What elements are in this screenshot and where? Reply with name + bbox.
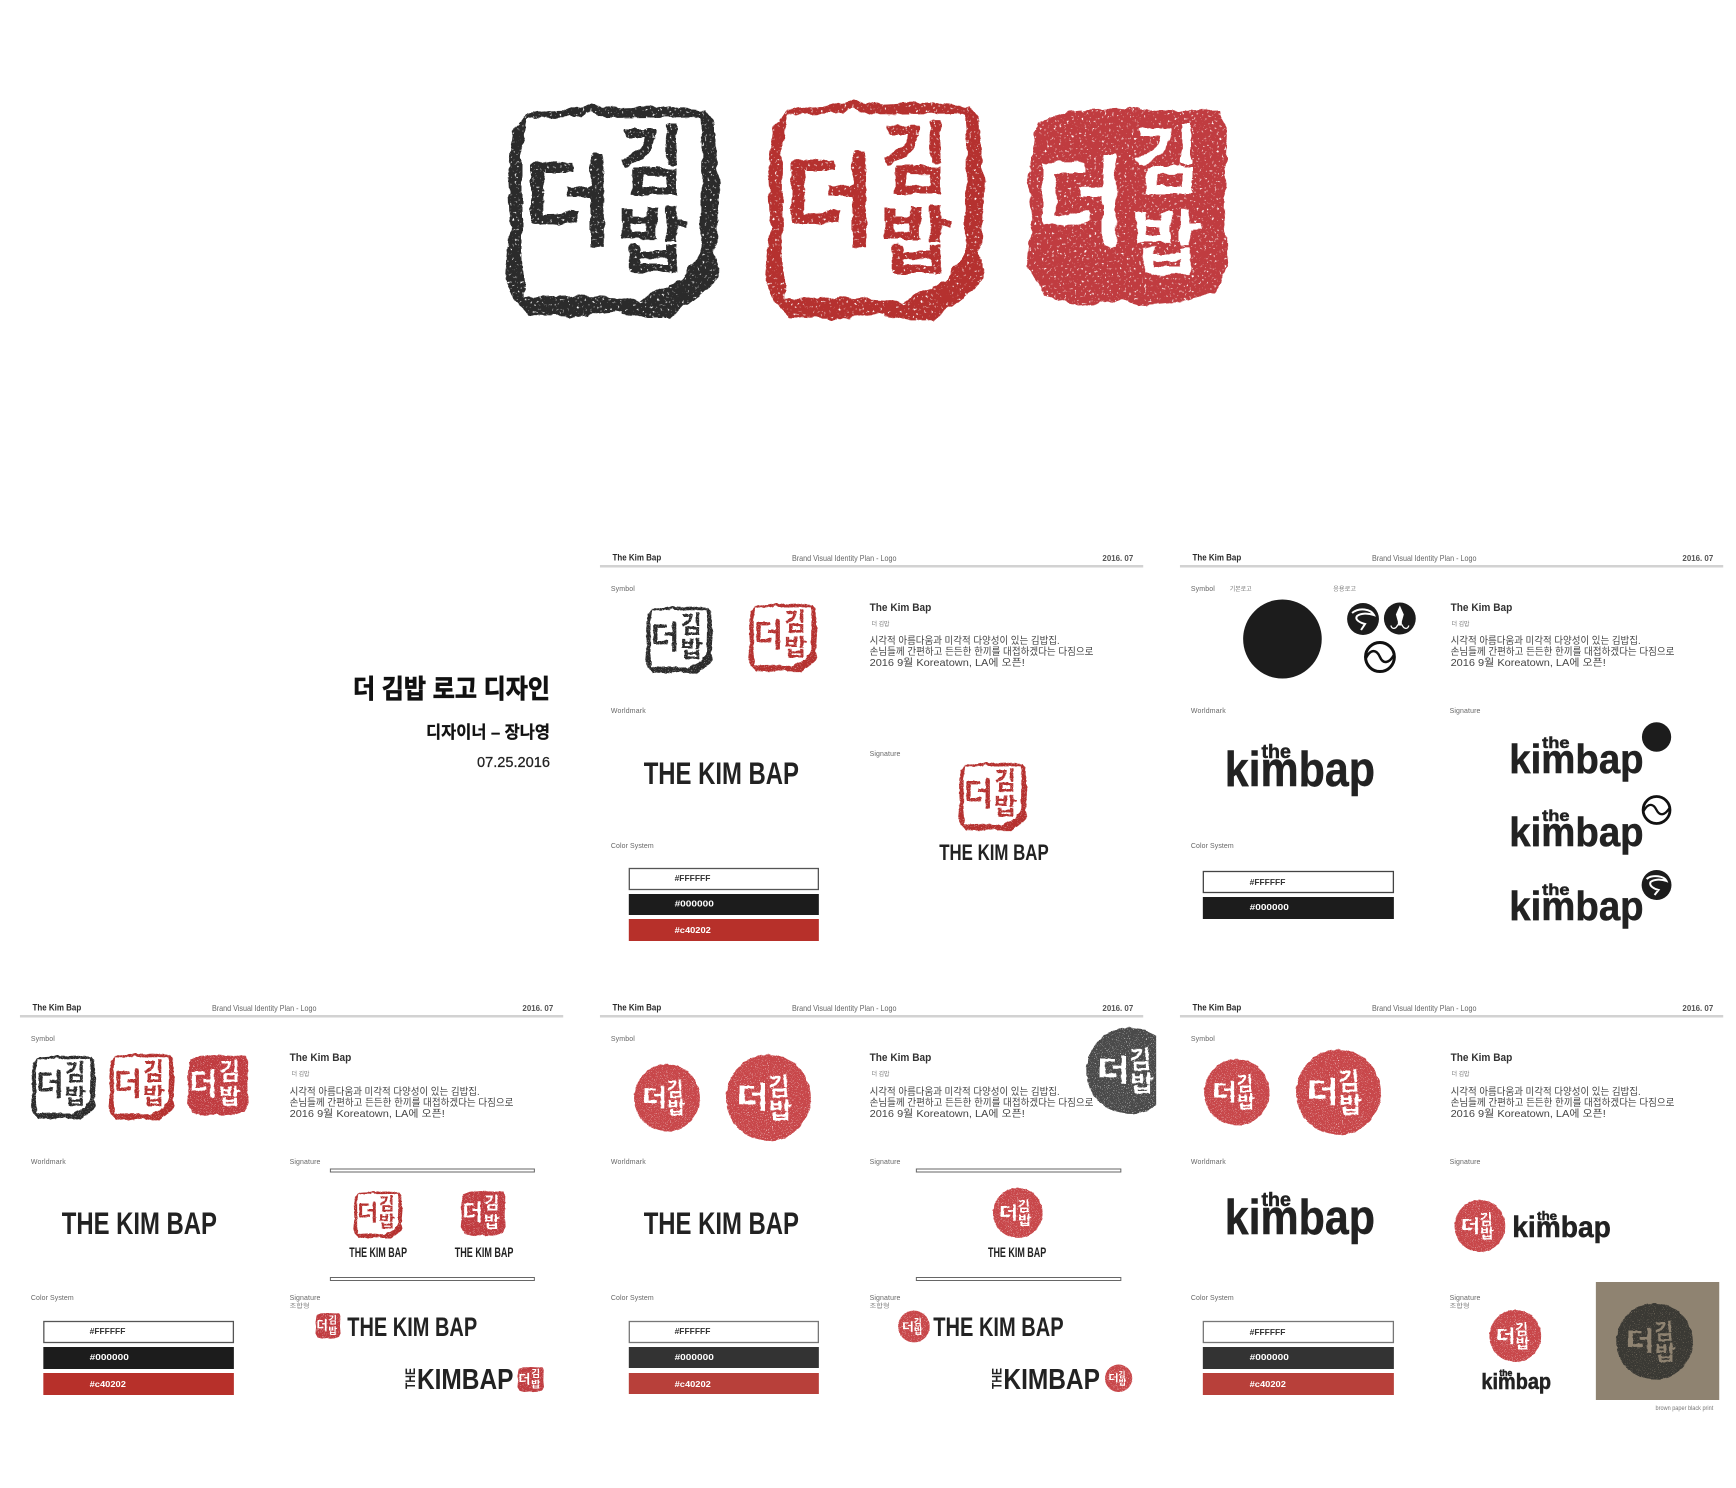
description: 손님들께 간편하고 든든한 한끼를 대접하겠다는 다짐으로	[870, 645, 1093, 658]
description: 시각적 아름다움과 미각적 다양성이 있는 김밥집.	[290, 1086, 480, 1098]
icon: solid stamp: 밥	[219, 1085, 241, 1109]
icon: shrimp	[1347, 603, 1379, 635]
icon: black stamp: 김	[65, 1060, 85, 1086]
signature: round stamp: 더	[999, 1203, 1018, 1223]
title: 더 김밥 로고 디자인	[353, 674, 550, 704]
icon: big black circle	[1243, 600, 1322, 678]
color swatches	[629, 1322, 819, 1394]
panel: three stamps with signatures: Color System	[31, 1295, 74, 1302]
panel: round stamps with wordmark: Worldmark	[611, 1159, 646, 1166]
icon: small round stamp: 밥	[667, 1098, 685, 1118]
description: 2016 9월 Koreatown, LA에 오픈!	[1451, 657, 1606, 669]
wordmark: the kimbap: the	[1262, 742, 1291, 763]
panel: round stamps with lowercase wordmark: Signature	[1450, 1159, 1481, 1166]
signature: outline stamp: THE KIM BAP	[349, 1244, 407, 1260]
combination signature: round stamp left: 밥	[914, 1326, 923, 1336]
description: 시각적 아름다움과 미각적 다양성이 있는 김밥집.	[870, 1086, 1060, 1098]
combination signature: stacked: 밥	[1516, 1336, 1530, 1352]
icon: black stamp: 밥	[680, 637, 703, 663]
signature lockup: THE KIM BAP	[939, 840, 1049, 865]
color swatches: #000000	[90, 1352, 129, 1362]
panel: round stamps with wordmark: Signature	[870, 1159, 901, 1166]
color swatches: #FFFFFF	[1250, 877, 1285, 887]
icon: red stamp	[748, 603, 817, 672]
panel: circle symbols and lowercase wordmark: 2016. 07	[1682, 554, 1714, 563]
combination signature: stamp right: 더	[518, 1372, 530, 1386]
panel: round stamps with lowercase wordmark: The Kim Bap	[1192, 1002, 1242, 1013]
panel: round stamps with lowercase wordmark: Signature	[1450, 1295, 1481, 1302]
brown paper print sample: 김	[1654, 1320, 1673, 1344]
icon: red stamp: 더	[754, 617, 783, 653]
signature: kimbap with black circle	[1509, 722, 1671, 782]
signature: kimbap with black circle: the	[1542, 735, 1570, 752]
combination signature: stacked	[1481, 1310, 1551, 1394]
description: 시각적 아름다움과 미각적 다양성이 있는 김밥집.	[1451, 1086, 1641, 1098]
icon: small round stamp: 김	[667, 1078, 683, 1100]
icon: large round stamp: 더	[1307, 1076, 1339, 1109]
signature: kimbap with yin-yang: kimbap	[1509, 809, 1644, 855]
icon: squid	[1384, 602, 1416, 634]
description: 손님들께 간편하고 든든한 한끼를 대접하겠다는 다짐으로	[1451, 645, 1674, 658]
combination signature: round stamp left: 더	[902, 1320, 914, 1333]
color swatches: #FFFFFF	[675, 1326, 710, 1336]
panel: three stamps with signatures: Signature	[290, 1159, 321, 1166]
hero logo: black outline stamp: 밥	[617, 201, 689, 281]
brown paper print sample: 더	[1626, 1328, 1655, 1357]
description: The Kim Bap	[290, 1052, 352, 1064]
hero logo: solid red stamp	[1027, 108, 1229, 306]
combination signature: stamp left: 밥	[328, 1325, 338, 1336]
icon: red stamp: 더	[114, 1067, 142, 1102]
panel: round stamps with wordmark: 조합형	[870, 1302, 889, 1310]
icon: red stamp: 김	[785, 609, 806, 637]
panel: circle symbols and lowercase wordmark: Brand Visual Identity Plan - Logo	[1372, 554, 1477, 563]
icon: grey round stamp, clipped: 밥	[1130, 1072, 1154, 1097]
icon: black stamp: 김	[681, 611, 702, 638]
icon: black stamp	[31, 1055, 96, 1119]
color swatches: #000000	[1250, 1352, 1289, 1362]
description: 2016 9월 Koreatown, LA에 오픈!	[870, 1108, 1025, 1120]
hero logo: red outline stamp	[765, 100, 985, 320]
description: 2016 9월 Koreatown, LA에 오픈!	[290, 1108, 445, 1120]
wordmark: the kimbap: kimbap	[1225, 743, 1375, 797]
signature: kimbap with black circle: kimbap	[1509, 736, 1644, 782]
color swatches	[43, 1322, 234, 1395]
color swatches	[629, 868, 819, 941]
signature: kimbap with shrimp: the	[1542, 882, 1570, 899]
signature: outline stamp: 밥	[379, 1213, 396, 1231]
description: 2016 9월 Koreatown, LA에 오픈!	[870, 657, 1025, 669]
description: 손님들께 간편하고 든든한 한끼를 대접하겠다는 다짐으로	[870, 1096, 1093, 1109]
combination signature: round stamp left	[898, 1311, 1064, 1342]
description	[870, 1052, 1093, 1120]
signature: solid stamp: THE KIM BAP	[455, 1244, 513, 1260]
panel: circle symbols and lowercase wordmark: Worldmark	[1191, 708, 1226, 715]
signature lockup	[939, 762, 1049, 865]
signature: round stamp and kimbap	[1455, 1200, 1611, 1252]
combination signature: round stamp right: 김	[1118, 1369, 1125, 1380]
description: 시각적 아름다움과 미각적 다양성이 있는 김밥집.	[1451, 635, 1641, 647]
signature: outline stamp: 김	[379, 1195, 394, 1214]
signature: round stamp: 김	[1018, 1198, 1030, 1215]
icon: large round stamp: 김	[1338, 1068, 1359, 1096]
combination signature: stamp right: 김	[531, 1368, 540, 1380]
icon: large round stamp: 김	[768, 1074, 789, 1102]
icon: red stamp	[109, 1053, 175, 1120]
signature: round stamp: 밥	[1018, 1213, 1032, 1228]
signature: round stamp and kimbap: 김	[1480, 1211, 1492, 1229]
panel: square stamp symbols and wordmark: 2016. 07	[1102, 554, 1134, 563]
combination signature: stamp right: THE	[402, 1368, 418, 1389]
description: 더 김밥	[1452, 620, 1470, 628]
panel: three stamps with signatures: Signature	[290, 1295, 321, 1302]
panel: three stamps with signatures: Symbol	[31, 1036, 55, 1043]
panel: circle symbols and lowercase wordmark: 기본로고	[1230, 585, 1252, 593]
panel: square stamp symbols and wordmark: Signature	[870, 751, 901, 758]
panel: three stamps with signatures: Brand Visual Identity Plan - Logo	[212, 1004, 317, 1013]
icon: solid stamp	[187, 1055, 249, 1116]
color swatches: #000000	[1250, 902, 1289, 912]
panel: circle symbols and lowercase wordmark: Color System	[1191, 843, 1234, 850]
panel: round stamps with wordmark: The Kim Bap	[612, 1002, 662, 1013]
panel: square stamp symbols and wordmark: Worldmark	[611, 708, 646, 715]
icon: small round stamp: 더	[1212, 1080, 1237, 1106]
combination signature: round stamp right: 밥	[1119, 1377, 1126, 1387]
description: 더 김밥	[872, 1070, 890, 1078]
signature: round stamp: THE KIM BAP	[988, 1244, 1046, 1260]
combination signature: stamp left: THE KIM BAP	[347, 1312, 477, 1342]
signature lockup: 더	[964, 776, 993, 812]
signature: round stamp and kimbap: kimbap	[1512, 1211, 1611, 1244]
color swatches: #000000	[675, 898, 714, 909]
combination signature: round stamp right: 더	[1108, 1372, 1119, 1384]
combination signature: round stamp right: THE	[988, 1368, 1004, 1389]
signature: solid stamp	[455, 1191, 513, 1260]
description: 더 김밥	[1452, 1070, 1470, 1078]
icon: grey round stamp, clipped: 더	[1097, 1054, 1130, 1088]
panel: round stamps with wordmark: Symbol	[611, 1036, 635, 1043]
panel: round stamps with lowercase wordmark: 2016. 07	[1682, 1004, 1714, 1013]
panel: three stamps with signatures: The Kim Bap	[32, 1002, 82, 1013]
color swatches: #c40202	[90, 1379, 126, 1389]
icon: red stamp: 밥	[143, 1084, 165, 1109]
description	[290, 1052, 513, 1120]
hero logo: black outline stamp: 김	[618, 120, 684, 205]
title block	[353, 674, 550, 771]
combination signature: stamp left	[315, 1312, 477, 1342]
description: 시각적 아름다움과 미각적 다양성이 있는 김밥집.	[870, 635, 1060, 647]
color swatches: #FFFFFF	[90, 1326, 125, 1336]
signature: round stamp and kimbap: 더	[1461, 1217, 1480, 1237]
color swatches: #FFFFFF	[1250, 1327, 1285, 1337]
combination signature: stacked: kimbap	[1481, 1369, 1551, 1394]
panel: circle symbols and lowercase wordmark	[1180, 552, 1723, 929]
brown paper print sample: brown paper black print	[1656, 1406, 1714, 1412]
icon: grey round stamp, clipped	[1086, 1026, 1156, 1114]
description: The Kim Bap	[1451, 1052, 1513, 1064]
icon: black stamp: 더	[36, 1068, 64, 1102]
date: 07.25.2016	[477, 755, 550, 771]
signature: solid stamp: 더	[462, 1200, 483, 1226]
icon: large round stamp	[1296, 1050, 1381, 1135]
icon: red stamp: 김	[143, 1058, 164, 1085]
combination signature: stacked: the	[1499, 1368, 1512, 1378]
hero logo: black outline stamp: 더	[522, 148, 614, 260]
color swatches: #c40202	[675, 925, 711, 935]
combination signature: stamp left: 더	[316, 1318, 328, 1333]
color swatches: #000000	[675, 1352, 714, 1362]
panel: square stamp symbols and wordmark: Symbol	[611, 586, 635, 593]
panel: round stamps with wordmark: Brand Visual Identity Plan - Logo	[792, 1004, 897, 1013]
brown paper print sample	[1596, 1282, 1719, 1412]
combination signature: stamp right: 밥	[531, 1379, 541, 1390]
hero logo: solid red stamp: 밥	[1131, 204, 1202, 283]
panel: three stamps with signatures: Worldmark	[31, 1159, 66, 1166]
wordmark: the kimbap: kimbap	[1225, 1191, 1375, 1245]
hero logo: black outline stamp	[505, 104, 720, 318]
panel: square stamp symbols and wordmark	[600, 552, 1143, 941]
signature: outline stamp	[349, 1191, 407, 1260]
description: The Kim Bap	[870, 602, 932, 614]
icon: black stamp: 밥	[65, 1085, 87, 1109]
signature: solid stamp: 밥	[484, 1213, 500, 1231]
signature lockup: 밥	[994, 794, 1017, 820]
panel: three stamps with signatures	[20, 1002, 563, 1396]
panel: three stamps with signatures: 2016. 07	[522, 1004, 554, 1013]
wordmark: the kimbap: the	[1262, 1190, 1291, 1211]
panel: square stamp symbols and wordmark: The Kim Bap	[612, 552, 662, 563]
panel: round stamps with lowercase wordmark: Worldmark	[1191, 1159, 1226, 1166]
icon: small round stamp	[634, 1064, 700, 1131]
icon: large round stamp: 더	[737, 1082, 768, 1115]
combination signature: round stamp left: THE KIM BAP	[933, 1312, 1064, 1342]
icon: solid stamp: 더	[189, 1068, 217, 1102]
signature lockup: 김	[994, 768, 1016, 796]
wordmark: THE KIM BAP	[62, 1206, 217, 1241]
icon: yin-yang ring	[1366, 642, 1394, 672]
signature: solid stamp: 김	[484, 1194, 499, 1213]
description: 2016 9월 Koreatown, LA에 오픈!	[1451, 1108, 1606, 1120]
signature: round stamp	[988, 1188, 1046, 1260]
panel: circle symbols and lowercase wordmark: 응용로고	[1333, 586, 1357, 593]
panel: round stamps with wordmark: Signature	[870, 1295, 901, 1302]
panel: square stamp symbols and wordmark: Brand Visual Identity Plan - Logo	[792, 554, 897, 563]
description	[1451, 602, 1674, 669]
icon: small round stamp: 김	[1236, 1073, 1253, 1095]
hero logo: red outline stamp: 밥	[880, 200, 953, 283]
icon: small round stamp	[1204, 1059, 1269, 1125]
description: 더 김밥	[292, 1070, 310, 1078]
description: 손님들께 간편하고 든든한 한끼를 대접하겠다는 다짐으로	[1451, 1096, 1674, 1109]
hero logo: red outline stamp: 김	[881, 118, 949, 205]
icon: red stamp: 밥	[784, 635, 807, 661]
combination signature: round stamp left: 김	[914, 1316, 922, 1328]
icon: small round stamp: 더	[642, 1086, 667, 1111]
panel: round stamps with lowercase wordmark: 조합형	[1450, 1302, 1469, 1310]
icon: black stamp	[645, 606, 713, 674]
hero logo: solid red stamp: 김	[1133, 119, 1199, 204]
combination signature: stacked: 더	[1496, 1327, 1515, 1347]
panel: circle symbols and lowercase wordmark: Symbol	[1191, 586, 1215, 593]
icon: black stamp: 더	[651, 619, 679, 655]
icon: large round stamp	[726, 1055, 811, 1141]
description: The Kim Bap	[870, 1052, 932, 1064]
designer: 디자이너 – 장나영	[426, 723, 550, 742]
description: 손님들께 간편하고 든든한 한끼를 대접하겠다는 다짐으로	[290, 1096, 513, 1109]
panel: round stamps with lowercase wordmark: Symbol	[1191, 1036, 1215, 1043]
icon: large round stamp: 밥	[1339, 1093, 1362, 1118]
panel: round stamps with wordmark: Color System	[611, 1295, 654, 1302]
combination signature: stamp left: 김	[329, 1314, 337, 1327]
wordmark: THE KIM BAP	[644, 1206, 799, 1241]
panel: round stamps with lowercase wordmark	[1180, 1002, 1723, 1412]
description	[870, 602, 1093, 669]
wordmark: THE KIM BAP	[644, 756, 799, 791]
icon: small round stamp: 밥	[1237, 1092, 1255, 1112]
combination signature: stacked: 김	[1515, 1321, 1528, 1339]
signature: kimbap with yin-yang: the	[1542, 808, 1570, 825]
color swatches: #FFFFFF	[675, 873, 710, 883]
icon: grey round stamp, clipped: 김	[1129, 1047, 1151, 1074]
panel: circle symbols and lowercase wordmark: Signature	[1450, 708, 1481, 715]
panel: round stamps with wordmark: 2016. 07	[1102, 1004, 1134, 1013]
panel: circle symbols and lowercase wordmark: The Kim Bap	[1192, 552, 1242, 563]
hero logo: red outline stamp: 더	[782, 145, 877, 260]
signature: kimbap with shrimp	[1509, 870, 1671, 929]
signature: outline stamp: 더	[357, 1201, 378, 1226]
panel: round stamps with lowercase wordmark: Brand Visual Identity Plan - Logo	[1372, 1004, 1477, 1013]
icon: large round stamp: 밥	[769, 1099, 792, 1124]
panel: three stamps with signatures: 조합형	[290, 1302, 309, 1310]
description: 더 김밥	[872, 620, 890, 628]
panel: square stamp symbols and wordmark: Color System	[611, 843, 654, 850]
color swatches: #c40202	[675, 1379, 711, 1389]
color swatches: #c40202	[1250, 1379, 1286, 1389]
signature: round stamp and kimbap: 밥	[1480, 1226, 1494, 1242]
panel: round stamps with wordmark	[600, 1002, 1173, 1396]
color swatches	[1203, 1322, 1394, 1395]
combination signature: stamp right: KIMBAP	[417, 1364, 513, 1396]
icon: solid stamp: 김	[219, 1058, 240, 1085]
signature: round stamp and kimbap: the	[1537, 1209, 1557, 1223]
color swatches	[1203, 872, 1394, 919]
panel: round stamps with lowercase wordmark: Color System	[1191, 1295, 1234, 1302]
combination signature: round stamp right: KIMBAP	[1003, 1364, 1100, 1396]
hero logo: solid red stamp: 더	[1034, 148, 1126, 260]
signature: kimbap with shrimp: kimbap	[1509, 883, 1644, 929]
description: The Kim Bap	[1451, 602, 1513, 614]
description	[1451, 1052, 1674, 1120]
brown paper print sample: 밥	[1655, 1342, 1676, 1364]
